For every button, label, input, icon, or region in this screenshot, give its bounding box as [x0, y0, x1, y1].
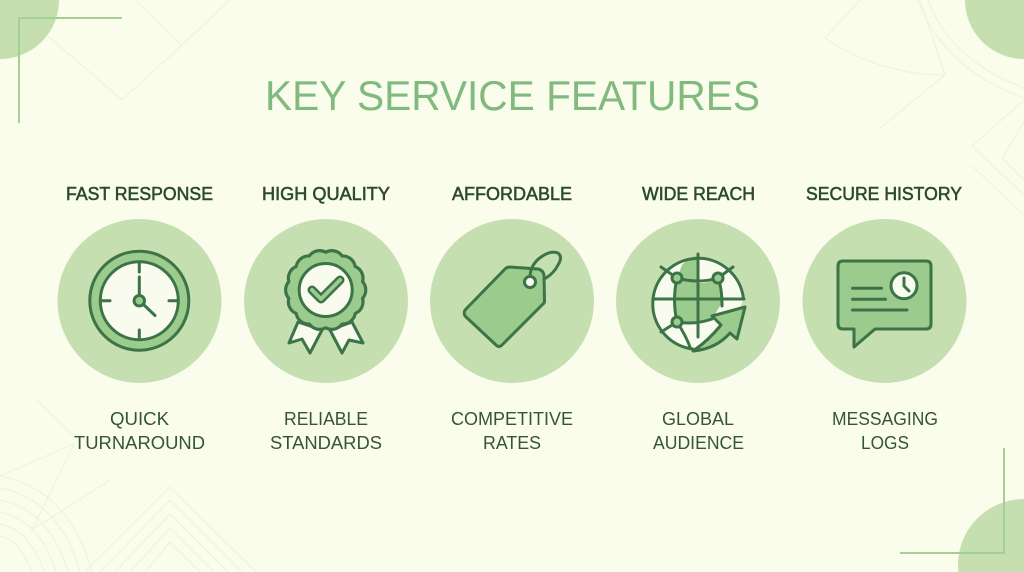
text: global audience: AUDIENCE — [653, 433, 744, 453]
heading: fast response: FAST RESPONSE — [66, 183, 213, 204]
corner bracket: top left — [19, 18, 122, 123]
heading: affordable: AFFORDABLE — [452, 183, 572, 204]
heading: high quality: HIGH QUALITY — [262, 183, 390, 204]
icon circle background — [616, 219, 780, 383]
icon: clock — [90, 251, 189, 350]
text: global audience — [653, 409, 744, 453]
text: messaging logs: MESSAGING — [832, 409, 938, 429]
text: messaging logs — [832, 409, 938, 453]
title: KEY SERVICE FEATURES — [265, 72, 760, 119]
icon: globe with arrow — [653, 254, 745, 351]
icon: award ribbon badge — [286, 251, 366, 353]
heading: secure history: SECURE HISTORY — [806, 183, 962, 204]
text: competitive rates: RATES — [483, 433, 541, 453]
text: competitive rates: COMPETITIVE — [451, 409, 573, 429]
icon: price tag — [464, 252, 560, 346]
text: messaging logs: LOGS — [861, 433, 909, 453]
icon circle background — [244, 219, 408, 383]
panel: secure history — [802, 183, 966, 453]
text: quick turnaround — [74, 409, 205, 453]
icon circle background — [58, 219, 222, 383]
text: quick turnaround: TURNAROUND — [74, 433, 205, 453]
icon: chat bubble with clock — [838, 261, 931, 347]
text: competitive rates — [451, 409, 573, 453]
panel: affordable — [430, 183, 594, 453]
panel: high quality — [244, 183, 408, 453]
decorative corner circle: top right — [965, 0, 1024, 59]
icon circle background — [802, 219, 966, 383]
decorative corner circle: top left — [0, 0, 59, 59]
decorative corner circle: bottom right — [958, 499, 1024, 572]
panel: fast response — [58, 183, 222, 453]
text: global audience: GLOBAL — [662, 409, 734, 429]
heading: wide reach: WIDE REACH — [642, 183, 755, 204]
text: reliable standards: STANDARDS — [270, 433, 382, 453]
text: reliable standards — [270, 409, 382, 453]
text: quick turnaround: QUICK — [110, 409, 169, 429]
corner bracket: bottom right — [900, 448, 1004, 553]
text: reliable standards: RELIABLE — [284, 409, 368, 429]
panel: wide reach — [616, 183, 780, 453]
icon circle background — [430, 219, 594, 383]
